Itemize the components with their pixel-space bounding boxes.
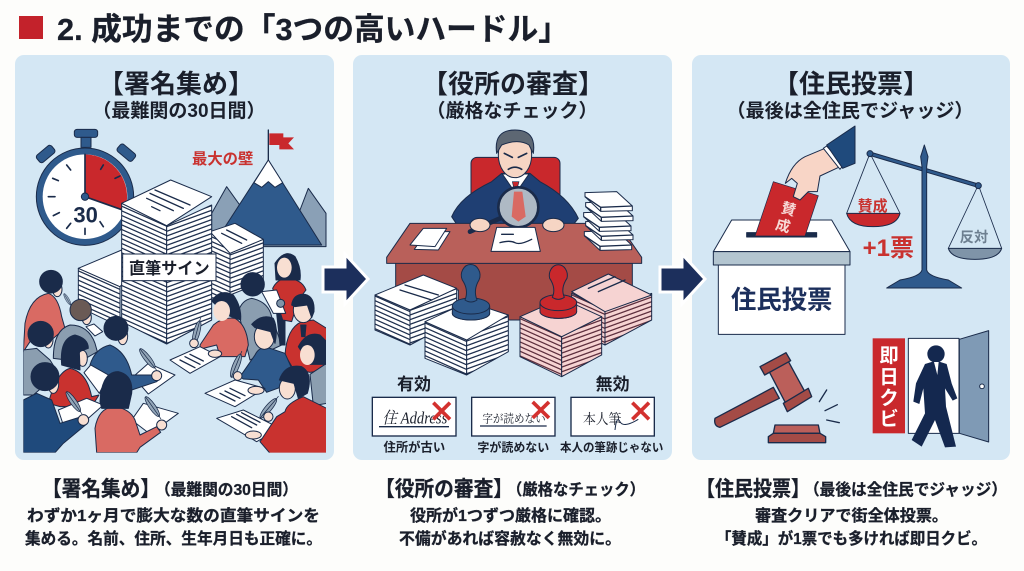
sign: fired immediately: [873, 338, 905, 433]
floor paper: right of blue: [133, 363, 175, 394]
sign: fired immediately: ビ: [879, 408, 899, 430]
caption block: resident vote: 【住民投票】: [696, 478, 810, 501]
caption block: resident vote: 審査クリアで街全体投票。: [755, 506, 948, 525]
sign: fired immediately: 即: [879, 346, 899, 367]
icon: red ballot: [755, 182, 818, 237]
paper stack: left: [78, 250, 140, 327]
caption block: office review: （厳格なチェック）: [507, 480, 645, 499]
caption block: office review: 【役所の審査】: [375, 478, 513, 501]
person: salmon top left: [23, 270, 65, 352]
document under review: [491, 227, 540, 251]
icon: balance scale: [847, 145, 1002, 288]
person: gray with brown hair: [53, 299, 97, 362]
floor paper: lower: [217, 410, 280, 442]
card: wrong handwriting: [571, 397, 654, 436]
card: unreadable: [472, 397, 555, 436]
label: handwritten signature: [123, 254, 216, 281]
person: navy front left: [23, 363, 89, 453]
stack: valid back: [375, 275, 457, 345]
person: gray back: [238, 273, 282, 360]
card: wrong handwriting: 本人筆: [583, 409, 621, 429]
label: resident vote on box: 住民投票: [731, 287, 832, 315]
icon: gavel: [715, 353, 839, 443]
panel subheading: strict check: （厳格なチェック）: [426, 99, 598, 122]
label: handwritten signature: 直筆サイン: [129, 259, 210, 278]
label: valid: 有効: [397, 375, 431, 394]
icon: red cross: [533, 402, 549, 418]
paper stack: centre: [122, 180, 212, 344]
caption block: resident vote: （最後は全住民でジャッジ）: [804, 480, 1007, 499]
stack: valid front: [425, 302, 508, 375]
icon: magnifying glass: [470, 187, 564, 232]
label: oppose: 反対: [960, 228, 988, 246]
person: salmon writer: [200, 293, 248, 357]
person: red front writer: [260, 366, 327, 453]
paper stack: right: [210, 223, 263, 298]
panel heading: resident vote: 【住民投票】: [773, 69, 929, 99]
caption block: signature collection: 【署名集め】: [42, 478, 160, 501]
stamp: blue valid: [452, 265, 490, 320]
floor paper: salmon writer: [170, 347, 220, 373]
sheet: held by red woman: [84, 365, 108, 393]
caption block: office review: 不備があれば容赦なく無効に。: [399, 529, 621, 548]
card: old address: 住 Address: [382, 408, 447, 427]
stamp: red invalid: [540, 265, 577, 318]
caption: unreadable: 字が読めない: [477, 439, 549, 454]
icon: mountains with flag: [212, 130, 326, 247]
signers: right group: [170, 254, 327, 453]
person: salmon front: [95, 372, 167, 453]
panel: resident vote: [692, 55, 1010, 460]
quill: salmon writer: [190, 317, 222, 357]
panel subheading: final judgement: （最後は全住民でジャッジ）: [726, 100, 974, 122]
arrow: step two to three: [660, 254, 705, 304]
caption block: office review: [375, 478, 645, 548]
stack: invalid back: [572, 274, 652, 345]
panel: office review: [353, 55, 672, 460]
signers: left group: [23, 270, 178, 453]
illustration: stern official: [452, 130, 578, 227]
person: gray left: [23, 321, 58, 395]
sign: fired immediately: ク: [879, 388, 899, 410]
caption block: resident vote: [696, 478, 1007, 548]
stopwatch number: 30: [73, 203, 98, 228]
quill: red writer: [245, 394, 281, 439]
caption: not own handwriting: 本人の筆跡じゃない: [560, 440, 663, 454]
label: biggest wall: 最大の壁: [192, 150, 253, 168]
icon: red cross: [433, 403, 450, 419]
icon: ballot box: [713, 220, 850, 334]
paper pile on desk: [584, 192, 633, 250]
person: blue jacket: [90, 316, 162, 402]
floor paper: left: [58, 398, 101, 422]
icon: man leaving: [912, 345, 957, 447]
label: approve: 賛成: [858, 197, 888, 215]
quill: blue writer: [228, 350, 264, 394]
panel subheading: hardest 30 days: （最難関の30日間）: [92, 100, 266, 122]
person: woman gray right: [298, 334, 327, 406]
caption block: resident vote: 「賛成」が1票でも多ければ即日クビ。: [716, 529, 987, 548]
label: plus one vote: +1票: [863, 235, 914, 262]
panel heading: office review: 【役所の審査】: [422, 69, 604, 99]
caption block: office review: 役所が1つずつ厳格に確認。: [410, 506, 611, 525]
papers on desk: [410, 228, 450, 250]
icon: voting hand: [785, 126, 855, 200]
person: red jacket: [285, 294, 327, 372]
caption block: signature collection: 集める。名前、住所、生年月日も正確に。: [25, 529, 322, 548]
panel: signature collection: [15, 55, 334, 460]
icon: red cross: [632, 403, 649, 419]
caption: old address: 住所が古い: [384, 439, 445, 454]
arrow: step one to two: [323, 254, 368, 304]
signers crowd: [23, 254, 327, 453]
card: old address: [372, 397, 456, 436]
caption block: signature collection: （最難関の30日間）: [155, 481, 298, 499]
caption block: signature collection: [25, 478, 322, 548]
person: blue writer: [240, 317, 292, 392]
icon: desk: [387, 223, 642, 320]
quill: top left: [63, 293, 72, 306]
stack: invalid front: [520, 298, 602, 377]
icon: red ballot: 成: [774, 215, 793, 237]
icon: stopwatch 30 days: [35, 129, 137, 245]
floor paper: blue writer: [205, 380, 265, 407]
icon: red ballot: 賛: [779, 200, 798, 220]
quill: blue jacket: [139, 348, 157, 370]
person: red woman: [48, 335, 99, 407]
sign: fired immediately: 日: [879, 367, 899, 388]
icon: exit door: [908, 331, 989, 442]
quill: front left: [66, 391, 82, 414]
title: 2. 成功までの「3つの高いハードル」: [57, 12, 569, 47]
card: unreadable: 字が読めない: [482, 411, 546, 427]
person: standing woman: [262, 254, 306, 345]
panel heading: signature collection: 【署名集め】: [98, 69, 254, 99]
floor paper: behind centre: [86, 324, 103, 336]
quill: salmon front: [144, 396, 162, 420]
caption block: signature collection: わずか1ヶ月で膨大な数の直筆サインを: [27, 506, 320, 525]
label: invalid: 無効: [596, 375, 630, 394]
floor paper: centre: [132, 403, 178, 434]
